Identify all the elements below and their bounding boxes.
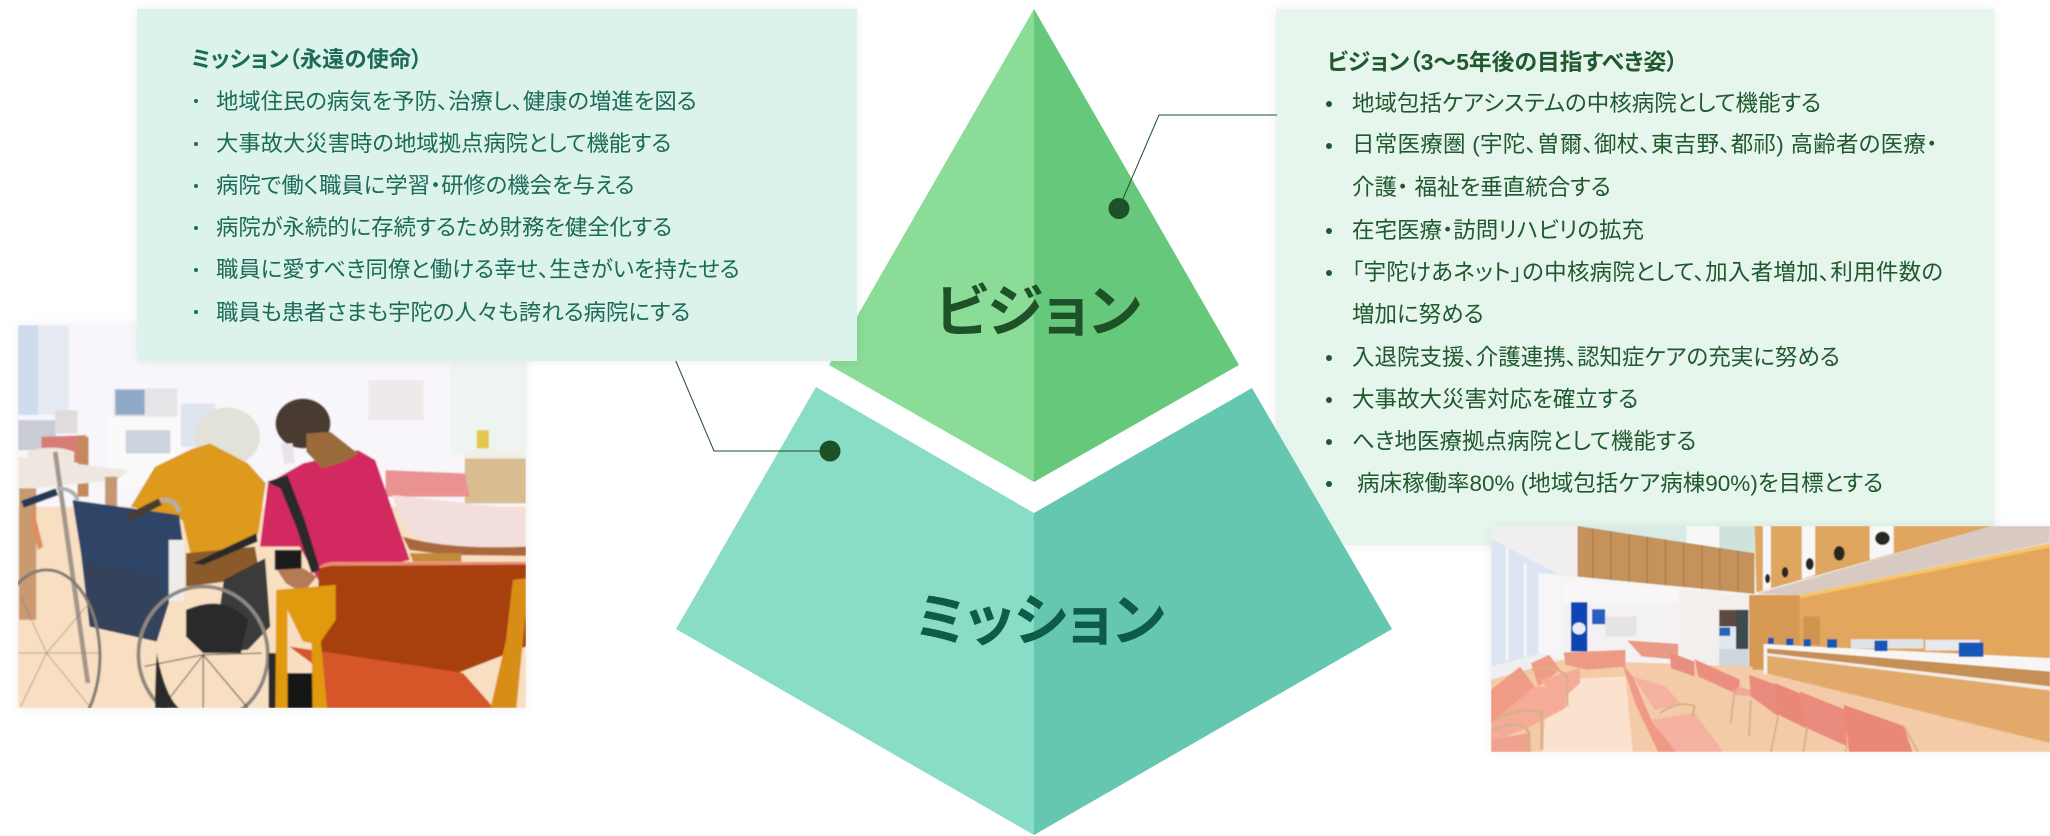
photo: hospital reception and waiting area <box>1491 526 2050 752</box>
list: vision items: 日常医療圏 (宇陀、曽爾、御杖、東吉野、都祁) 高齢者の医療・ <box>1352 132 1938 157</box>
list: mission items: 職員も患者さまも宇陀の人々も誇れる病院にする <box>216 300 690 325</box>
list: vision items: 「宇陀けあネット」の中核病院として、加入者増加、利用件数の <box>1352 260 1943 285</box>
list: vision items: 大事故大災害対応を確立する <box>1352 387 1638 412</box>
list: mission items: 地域住民の病気を予防、治療し、健康の増進を図る <box>216 89 697 114</box>
list: mission items: 職員に愛すべき同僚と働ける幸せ、生きがいを持たせる <box>216 257 740 282</box>
list: vision items <box>1326 91 1943 496</box>
list: vision items: 介護・ 福祉を垂直統合する <box>1352 175 1611 200</box>
list: vision items: 入退院支援、介護連携、認知症ケアの充実に努める <box>1352 345 1840 370</box>
callout: vision leader line <box>1108 115 1277 219</box>
callout: mission leader line <box>675 359 840 462</box>
list: vision items: 病床稼働率80% (地域包括ケア病棟90%)を目標とする <box>1357 471 1883 496</box>
panel: mission <box>137 9 857 361</box>
list: vision items: へき地医療拠点病院として機能する <box>1352 429 1696 454</box>
heading: vision: ビジョン（3～5年後の目指すべき姿） <box>1327 49 1678 75</box>
list: mission items: 大事故大災害時の地域拠点病院として機能する <box>216 131 671 156</box>
photo: nurse and patient in wheelchair <box>18 325 526 708</box>
list: mission items <box>194 89 740 325</box>
label: vision: ビジョン <box>935 280 1141 344</box>
vision block <box>829 9 1239 482</box>
label: mission: ミッション <box>915 589 1165 653</box>
mission block <box>676 387 1392 835</box>
panel: vision <box>1276 9 1994 545</box>
list: vision items: 地域包括ケアシステムの中核病院として機能する <box>1352 91 1821 116</box>
list: vision items: 在宅医療・訪問リハビリの拡充 <box>1352 218 1644 243</box>
list: mission items: 病院で働く職員に学習・研修の機会を与える <box>216 173 635 198</box>
heading: mission: ミッション（永遠の使命） <box>191 47 422 72</box>
list: vision items: 増加に努める <box>1352 302 1484 327</box>
list: mission items: 病院が永続的に存続するため財務を健全化する <box>216 215 672 240</box>
